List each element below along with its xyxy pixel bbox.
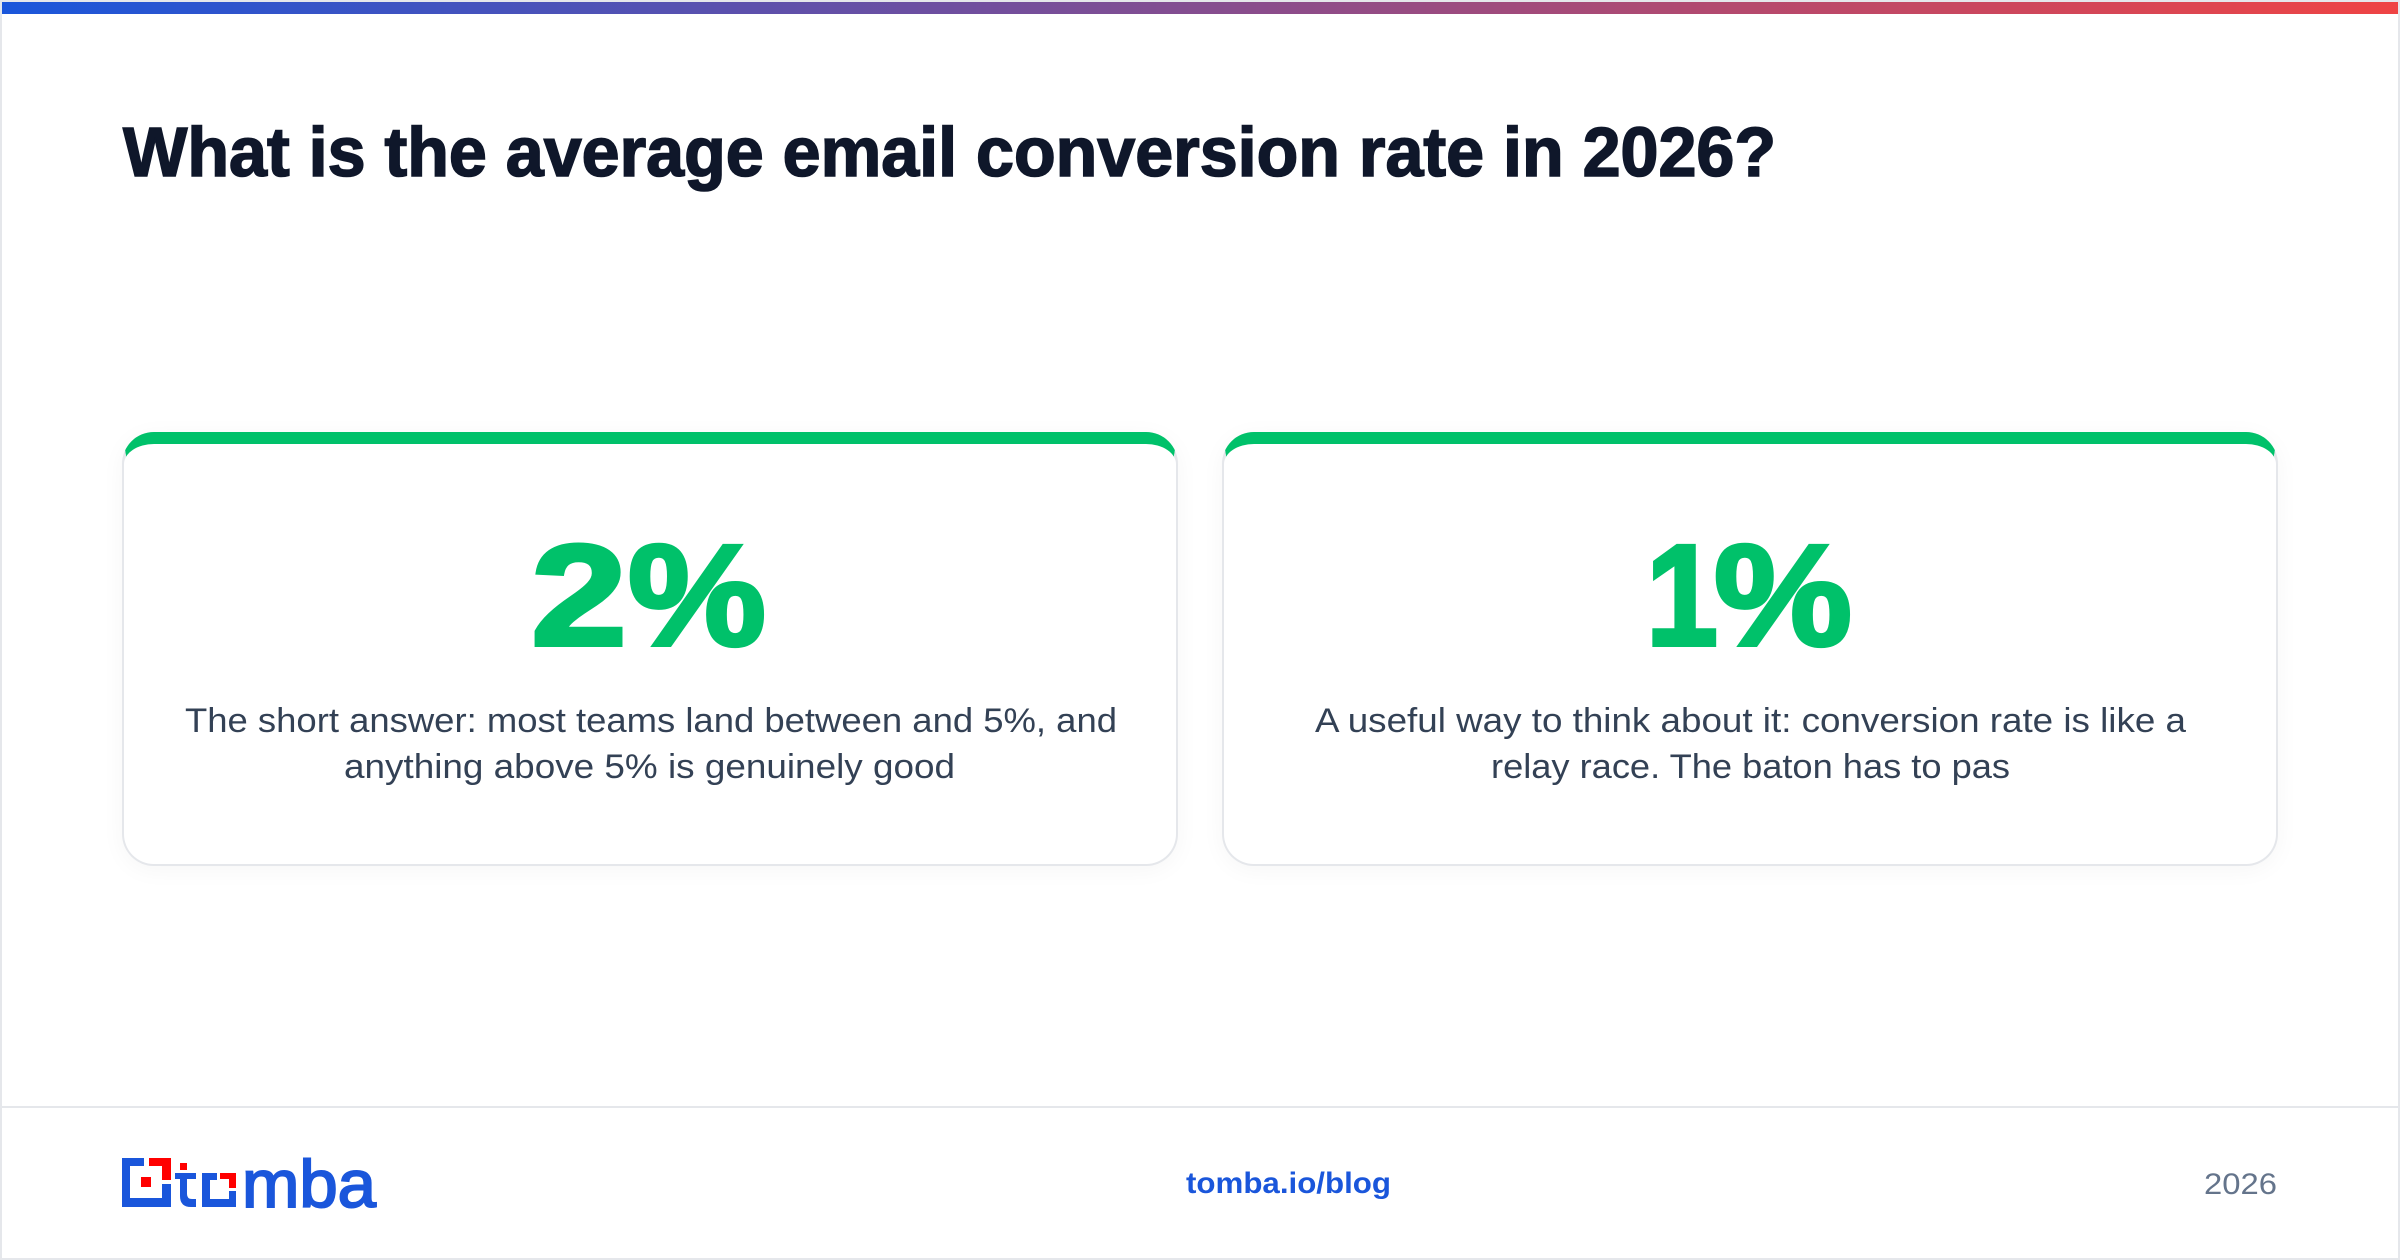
logo letter o: red part [220,1173,236,1188]
logo icon: red square [141,1177,151,1187]
logo letter o: blue part [202,1173,236,1207]
stat text group [1315,515,2186,786]
card background [122,432,1178,866]
footer divider [2,1106,2398,1108]
description line 1: A useful way to think about it: conversion rate is like a [1315,702,2186,740]
panel: 2% stat card [122,432,1178,866]
description line 1: The short answer: most teams land between and 5%, and [185,702,1117,740]
footer link: tomba.io/blog [1186,1167,1391,1200]
logo icon: blue bracket [122,1158,171,1207]
stat value: 1%: % [1714,515,1852,676]
logo letter t [175,1173,196,1207]
title: What is the average email conversion rate in 2026? [123,113,1776,191]
top gradient bar [2,2,2398,14]
card background [1222,432,2278,866]
footer year: 2026 [2204,1168,2277,1201]
stat value: 2%: % [628,515,766,676]
stat value: 2%: 2 [531,515,627,676]
logo wordmark: mba: mba [242,1147,377,1222]
panel: 1% stat card [1222,432,2278,866]
description line 2: relay race. The baton has to pas [1491,748,2010,786]
logo icon: red corner [149,1158,171,1180]
description line 2: anything above 5% is genuinely good [344,748,955,786]
logo red dot [180,1163,187,1170]
stat text group [185,515,1117,786]
stat value: 1%: 1 [1646,515,1718,676]
